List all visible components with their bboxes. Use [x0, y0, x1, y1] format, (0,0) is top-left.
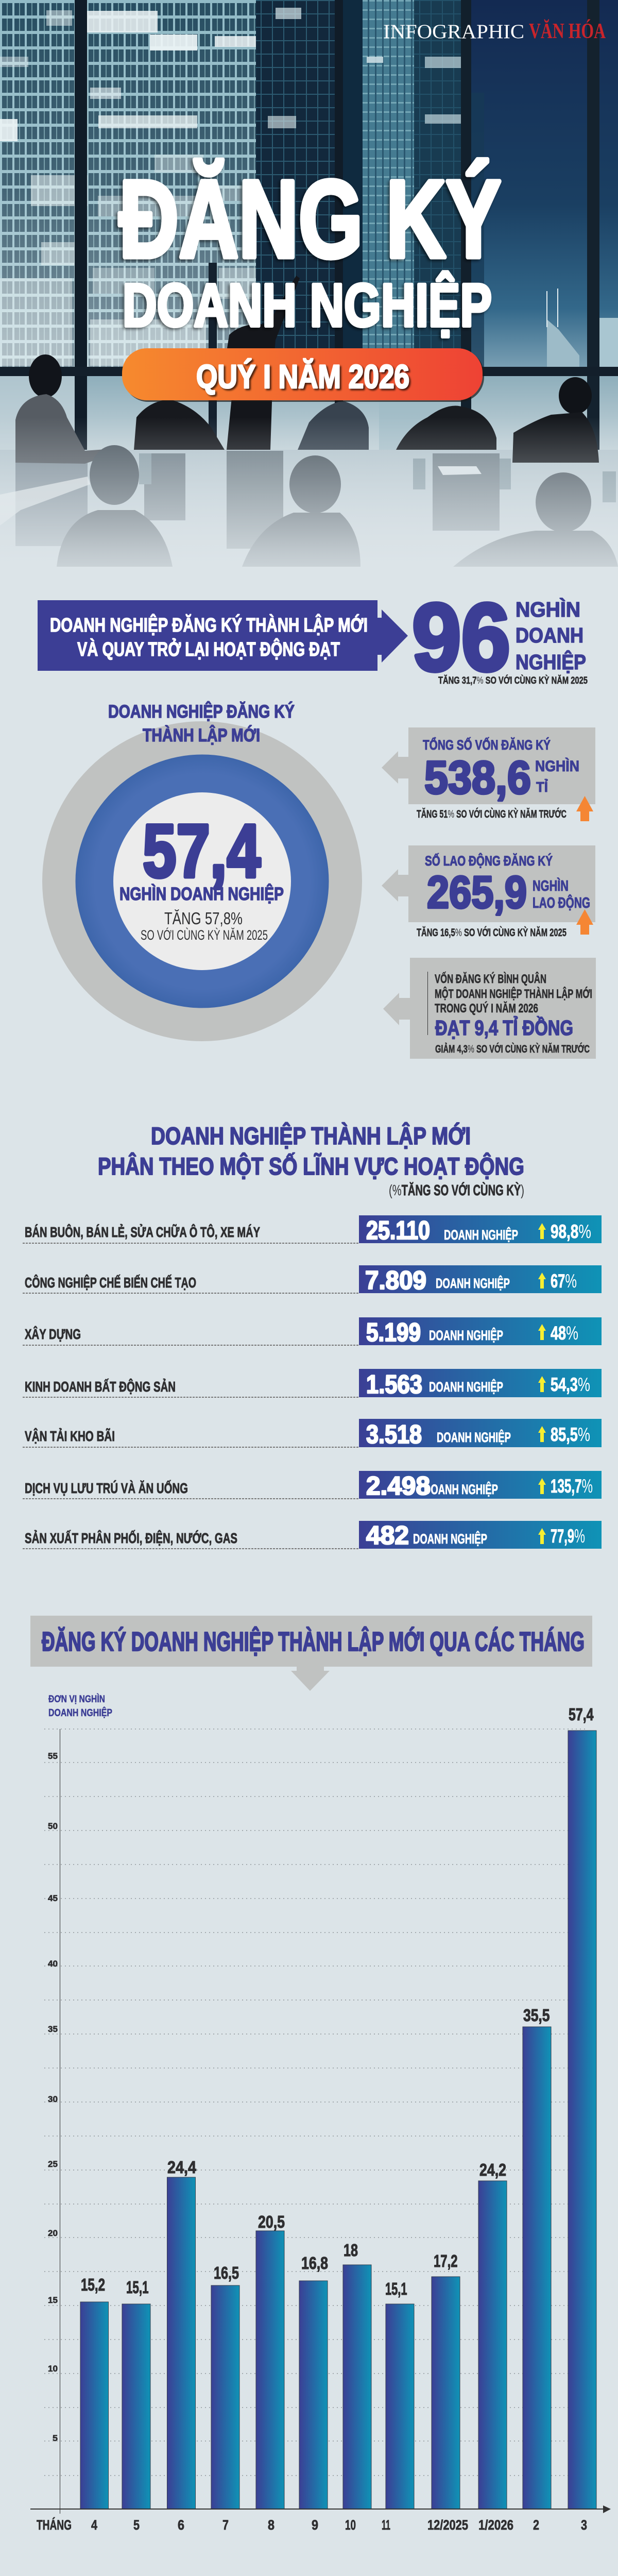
main title: ĐĂNG KÝ — [119, 158, 501, 281]
row: wholesale and retail: 25.110 — [366, 1216, 430, 1245]
headline banner arrow — [38, 600, 408, 671]
y axis with tick labels: 30 — [48, 2094, 58, 2104]
row: power, water, gas: 482 — [366, 1521, 409, 1550]
row: transport and warehousing: VẬN TẢI KHO BÃI — [25, 1428, 115, 1444]
panel: registered capital: TỔNG SỐ VỐN ĐĂNG KÝ — [423, 736, 551, 753]
y axis with tick labels: 35 — [48, 2024, 58, 2034]
panel: newly established circle: NGHÌN DOANH NGHIỆP — [119, 884, 284, 904]
panel: registered capital: 538,6 — [424, 752, 531, 804]
row: construction: 5.199 — [366, 1318, 421, 1347]
period pill: QUÝ I NĂM 2026 — [196, 358, 409, 395]
x axis with month labels: 11 — [382, 2517, 390, 2533]
panel: newly established circle: THÀNH LẬP MỚI — [143, 725, 260, 745]
value labels: 24,4 — [167, 2158, 197, 2177]
value labels: 57,4 — [569, 1705, 594, 1724]
panel: registered capital: TĂNG 51% SO VỚI CÙNG KỲ NĂM TRƯỚC — [417, 808, 566, 820]
row: real estate: 54,3% — [551, 1374, 590, 1395]
row: accommodation and food: 135,7% — [551, 1476, 593, 1497]
row: manufacturing: 7.809 — [365, 1266, 426, 1295]
x axis with month labels: 10 — [345, 2517, 356, 2533]
bar chart: monthly registrations — [30, 1693, 611, 2533]
heading: by sector — [98, 1122, 524, 1199]
panel: newly established circle: TĂNG 57,8% — [164, 909, 243, 928]
x axis with month labels: 9 — [312, 2517, 318, 2533]
panel: average capital per enterprise: ĐẠT 9,4 TỈ ĐỒNG — [435, 1016, 573, 1040]
row: transport and warehousing — [23, 1419, 602, 1449]
panel: registered labour: SỐ LAO ĐỘNG ĐĂNG KÝ — [425, 852, 553, 869]
hero fade to page colour — [0, 417, 618, 592]
value labels: 15,1 — [126, 2278, 148, 2297]
row: accommodation and food — [23, 1471, 602, 1500]
row: wholesale and retail — [23, 1215, 602, 1245]
chart unit label: DOANH NGHIỆP — [48, 1706, 112, 1719]
headline number 96 thousand: 96 — [412, 584, 510, 691]
x axis with month labels: 6 — [178, 2517, 184, 2533]
row: manufacturing: CÔNG NGHIỆP CHẾ BIẾN CHẾ TẠO — [25, 1274, 196, 1291]
headline number 96 thousand: NGHIỆP — [516, 650, 586, 674]
headline banner arrow: DOANH NGHIỆP ĐĂNG KÝ THÀNH LẬP MỚI — [50, 614, 368, 636]
row: transport and warehousing: 3.518 — [366, 1420, 422, 1449]
row: construction — [23, 1317, 602, 1347]
period pill — [122, 348, 484, 402]
headline number 96 thousand — [412, 584, 588, 691]
y axis with tick labels: 15 — [48, 2295, 58, 2305]
panel: registered capital — [382, 727, 595, 821]
x axis with month labels: 2 — [533, 2517, 539, 2533]
panel: registered labour: LAO ĐỘNG — [533, 894, 590, 911]
hero photo: office window over city towers — [0, 0, 618, 453]
row: power, water, gas: 77,9% — [551, 1526, 585, 1547]
panel: newly established circle: 57,4 — [143, 809, 261, 893]
y axis with tick labels: 5 — [53, 2433, 58, 2443]
row: wholesale and retail: DOANH NGHIỆP — [444, 1227, 518, 1243]
value labels: 17,2 — [434, 2251, 457, 2270]
x axis with month labels: 4 — [91, 2517, 97, 2533]
y axis with tick labels: 40 — [48, 1959, 58, 1969]
conference table with reflections — [0, 450, 618, 573]
value labels — [81, 1705, 594, 2298]
x axis with month labels: 7 — [222, 2517, 229, 2533]
y axis with tick labels: 55 — [48, 1751, 58, 1761]
row: transport and warehousing: DOANH NGHIỆP — [437, 1429, 511, 1445]
row: real estate — [23, 1369, 602, 1399]
y axis with tick labels: 20 — [48, 2228, 58, 2238]
panel: registered labour: TĂNG 16,5% SO VỚI CÙNG KỲ NĂM 2025 — [417, 926, 566, 939]
value labels: 15,2 — [81, 2275, 105, 2294]
bars — [80, 1731, 596, 2509]
heading: by sector: (%TĂNG SO VỚI CÙNG KỲ) — [389, 1181, 524, 1199]
row: real estate: KINH DOANH BẤT ĐỘNG SẢN — [25, 1378, 176, 1395]
panel: average capital per enterprise: VỐN ĐĂNG KÝ BÌNH QUÂN — [435, 972, 546, 986]
panel: registered labour: NGHÌN — [533, 877, 569, 894]
heading banner: monthly chart — [30, 1616, 592, 1691]
y axis with tick labels — [48, 1729, 60, 2514]
seated and standing people silhouettes — [0, 276, 599, 526]
panel: newly established circle: DOANH NGHIỆP ĐĂNG KÝ — [108, 701, 295, 722]
row: accommodation and food: DOANH NGHIỆP — [424, 1481, 498, 1497]
y axis with tick labels: 50 — [48, 1821, 58, 1831]
panel: registered capital: NGHÌN — [535, 757, 579, 775]
row: power, water, gas: DOANH NGHIỆP — [413, 1531, 487, 1547]
headline number 96 thousand: DOANH — [516, 623, 583, 647]
headline banner arrow: VÀ QUAY TRỞ LẠI HOẠT ĐỘNG ĐẠT — [77, 637, 340, 660]
row: transport and warehousing: 85,5% — [551, 1424, 590, 1445]
row: construction: 48% — [551, 1323, 578, 1344]
x axis with month labels: 5 — [133, 2517, 140, 2533]
headline number 96 thousand: NGHÌN — [516, 598, 580, 621]
value labels: 24,2 — [479, 2160, 506, 2179]
sector table — [23, 1215, 602, 1550]
y axis with tick labels: 10 — [48, 2364, 58, 2374]
chart unit label: ĐƠN VỊ NGHÌN — [48, 1693, 105, 1705]
chart unit label — [48, 1693, 112, 1719]
panel: newly established circle: SO VỚI CÙNG KỲ NĂM 2025 — [141, 927, 268, 943]
panel: newly established circle — [42, 701, 362, 1041]
row: wholesale and retail: BÁN BUÔN, BÁN LẺ, SỬA CHỮA Ô TÔ, XE MÁY — [25, 1224, 260, 1240]
icon: orange up arrow 2 — [576, 909, 593, 935]
main title — [119, 158, 501, 340]
row: manufacturing: 67% — [551, 1270, 577, 1292]
value labels: 16,8 — [301, 2253, 328, 2273]
row: real estate: 1.563 — [366, 1370, 422, 1399]
row: power, water, gas: SẢN XUẤT PHÂN PHỐI, ĐIỆN, NƯỚC, GAS — [25, 1530, 237, 1546]
panel: average capital per enterprise: TRONG QUÝ I NĂM 2026 — [435, 1001, 538, 1015]
value labels: 20,5 — [258, 2212, 285, 2231]
heading: by sector: DOANH NGHIỆP THÀNH LẬP MỚI — [151, 1122, 471, 1149]
y axis with tick labels: 45 — [48, 1893, 58, 1903]
row: construction: XÂY DỰNG — [25, 1326, 81, 1342]
value labels: 35,5 — [523, 2006, 550, 2025]
row: manufacturing — [23, 1265, 602, 1295]
panel: registered labour: 265,9 — [427, 867, 527, 918]
panel: average capital per enterprise — [383, 958, 596, 1059]
row: wholesale and retail: 98,8% — [551, 1221, 591, 1242]
value labels: 16,5 — [214, 2263, 239, 2282]
main title: DOANH NGHIỆP — [123, 271, 492, 340]
x axis with month labels: THÁNG — [37, 2517, 72, 2533]
value labels: 15,1 — [385, 2279, 407, 2298]
row: power, water, gas — [23, 1521, 602, 1550]
panel: registered labour — [382, 845, 595, 939]
x axis with month labels: 12/2025 — [427, 2517, 468, 2533]
x axis with month labels: 8 — [268, 2517, 274, 2533]
x axis with month labels: 1/2026 — [478, 2517, 513, 2533]
headline number 96 thousand: TĂNG 31,7% SO VỚI CÙNG KỲ NĂM 2025 — [438, 675, 588, 686]
icon: orange up arrow — [576, 796, 593, 821]
row: manufacturing: DOANH NGHIỆP — [436, 1275, 510, 1291]
value labels: 18 — [344, 2241, 358, 2260]
row: accommodation and food: 2.498 — [366, 1471, 430, 1500]
foreground people silhouettes — [57, 445, 618, 567]
x axis with month labels: 3 — [581, 2517, 587, 2533]
logo top — [383, 19, 606, 43]
x axis with month labels — [30, 2505, 611, 2533]
row: real estate: DOANH NGHIỆP — [429, 1379, 503, 1395]
logo top: INFOGRAPHIC — [383, 21, 524, 43]
row: accommodation and food: DỊCH VỤ LƯU TRÚ VÀ ĂN UỐNG — [25, 1480, 188, 1496]
panel: registered capital: TỈ — [536, 778, 548, 795]
row: construction: DOANH NGHIỆP — [429, 1327, 503, 1343]
heading: by sector: PHÂN THEO MỘT SỐ LĨNH VỰC HOẠT ĐỘNG — [98, 1153, 524, 1180]
y axis with tick labels: 25 — [48, 2159, 58, 2169]
